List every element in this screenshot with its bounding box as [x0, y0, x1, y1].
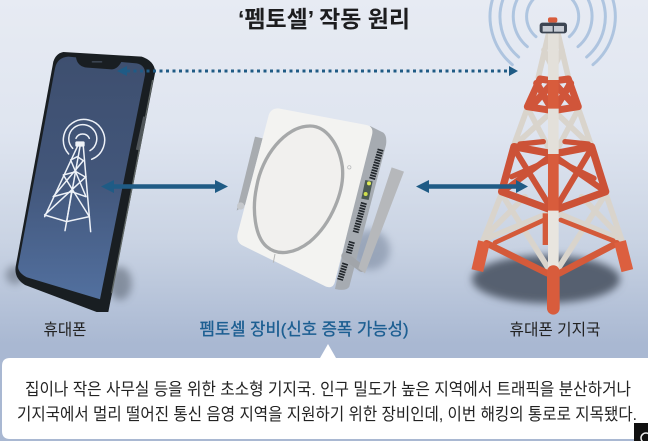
label: cell tower: 휴대폰 기지국	[510, 321, 600, 339]
feet	[477, 242, 627, 271]
label: phone: 휴대폰	[44, 321, 86, 339]
icon: smartphone	[6, 52, 155, 312]
icon: tower on screen	[45, 119, 105, 232]
radio waves	[490, 0, 615, 65]
red upper section	[527, 79, 578, 111]
label: femtocell device: 펨토셀 장비(신호 증폭 가능성)	[200, 320, 408, 339]
arrow: phone to femtocell	[101, 180, 228, 193]
status lights	[361, 180, 373, 200]
arrow: femtocell to tower	[416, 180, 528, 193]
callout text	[17, 380, 637, 424]
icon: cell tower	[472, 0, 627, 308]
vents	[340, 149, 381, 280]
arrow: phone to tower dotted	[117, 66, 518, 76]
red middle section	[502, 142, 606, 211]
icon: femtocell device	[237, 108, 404, 290]
central post	[537, 33, 569, 308]
callout	[2, 344, 648, 439]
antenna head	[540, 17, 567, 33]
white lattice	[483, 35, 622, 268]
lower red beams	[487, 213, 617, 273]
corner badge	[634, 423, 648, 441]
title: ‘펨토셀’ 작동 원리	[238, 6, 410, 32]
